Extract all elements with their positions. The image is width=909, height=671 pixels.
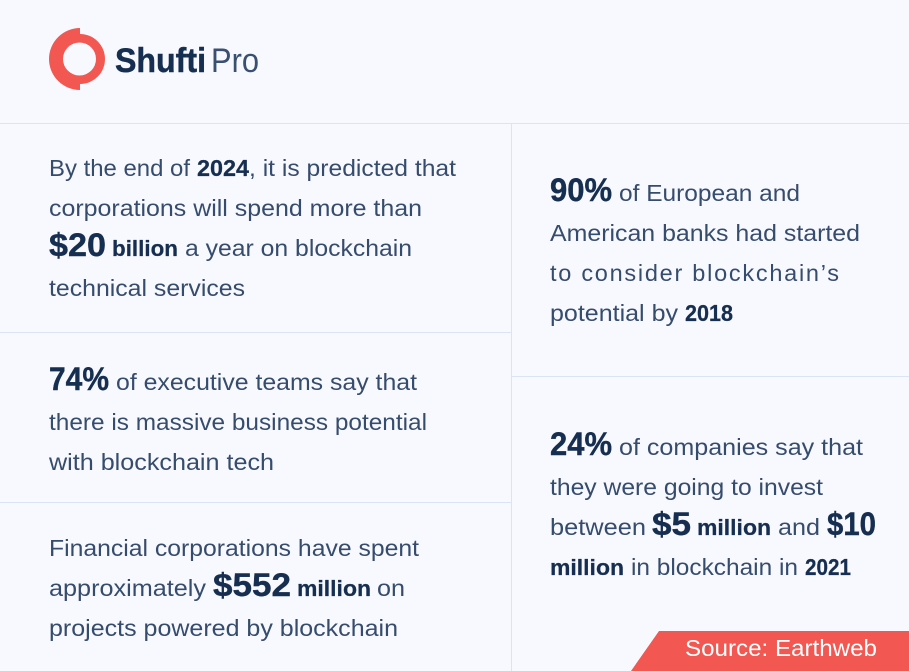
text block: 24% of companies: in blockchain in xyxy=(631,554,798,580)
text block: 90% of banks: 90% xyxy=(550,172,612,208)
text block: 74% of executive teams: with blockchain tech xyxy=(48,449,274,475)
text block: 90% of banks xyxy=(550,172,860,326)
icon: logo ring xyxy=(49,28,105,90)
text block: 2024 corporate spending: By the end of xyxy=(49,155,190,181)
text block: 2024 corporate spending: , it is predicted that xyxy=(249,155,456,181)
text block: 74% of executive teams: of executive teams say that xyxy=(116,369,417,395)
logo wordmark xyxy=(115,42,259,80)
source badge xyxy=(631,631,909,671)
logo: Shufti Pro xyxy=(49,28,259,90)
text block: $552 million spent: Financial corporations have spent xyxy=(49,535,419,561)
source badge: Source: Earthweb xyxy=(685,635,877,661)
logo wordmark: Shufti xyxy=(115,42,206,80)
text block: 24% of companies: they were going to invest xyxy=(550,474,823,500)
text block: 24% of companies: million xyxy=(550,555,624,580)
text block: 74% of executive teams: there is massive business potential xyxy=(49,409,427,435)
text block: 24% of companies: 24% xyxy=(550,426,612,462)
text block: 2024 corporate spending: 2024 xyxy=(197,155,249,181)
text block: 2024 corporate spending: technical services xyxy=(49,275,245,301)
text block: 24% of companies: million xyxy=(697,515,771,540)
text block: 90% of banks: of European and xyxy=(619,180,800,206)
text block: 24% of companies: of companies say that xyxy=(619,434,863,460)
text block: 2024 corporate spending xyxy=(49,155,456,301)
text block: 90% of banks: potential by xyxy=(550,300,678,326)
text block: 24% of companies: between xyxy=(550,514,646,540)
text block: 24% of companies xyxy=(550,426,876,580)
text block: 74% of executive teams: 74% xyxy=(49,361,109,397)
text block: 74% of executive teams xyxy=(48,361,427,475)
text block: 24% of companies: and xyxy=(778,514,820,540)
text block: 2024 corporate spending: corporations will spend more than xyxy=(49,195,422,221)
text block: 2024 corporate spending: billion xyxy=(112,236,178,261)
text block: $552 million spent: million xyxy=(297,576,371,601)
text block: 24% of companies: $10 xyxy=(827,506,876,542)
text block: $552 million spent xyxy=(49,535,419,641)
text block: $552 million spent: projects powered by blockchain xyxy=(49,615,398,641)
text block: 24% of companies: $5 xyxy=(652,506,691,542)
text block: $552 million spent: $552 xyxy=(213,567,291,603)
text block: 2024 corporate spending: a year on blockchain xyxy=(185,235,412,261)
text block: 24% of companies: 2021 xyxy=(805,554,851,580)
text block: 90% of banks: 2018 xyxy=(685,300,733,326)
text block: 2024 corporate spending: $20 xyxy=(49,227,106,263)
text block: 90% of banks: American banks had started xyxy=(550,220,860,246)
text block: $552 million spent: on xyxy=(377,575,405,601)
logo wordmark: Pro xyxy=(211,42,259,80)
text block: 90% of banks: to consider blockchain’s xyxy=(550,260,839,286)
text block: $552 million spent: approximately xyxy=(49,575,206,601)
